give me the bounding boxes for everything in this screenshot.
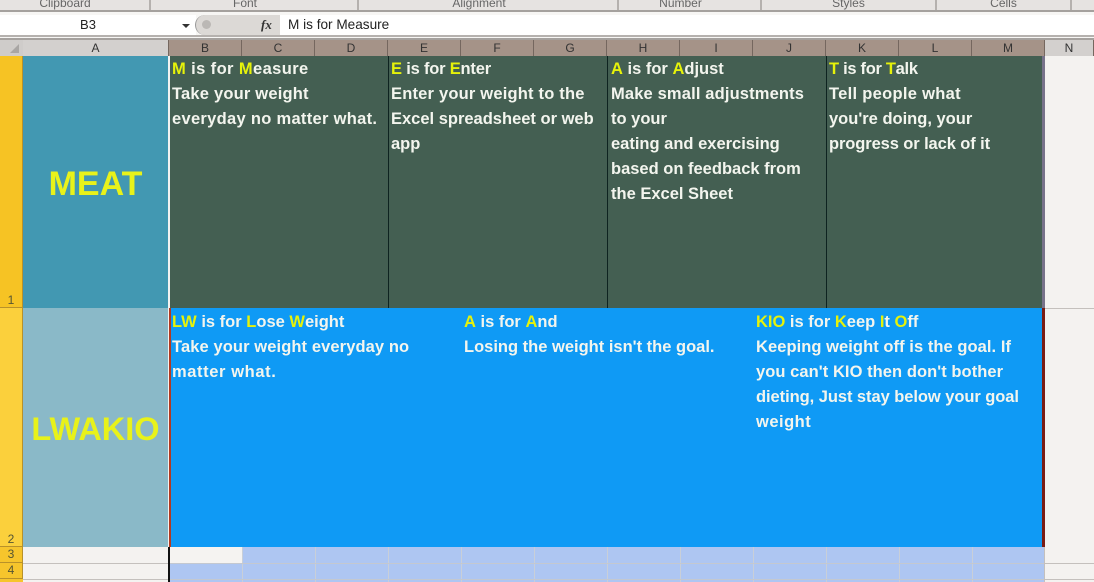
formula bar grip <box>195 15 280 35</box>
text: T is for Talk: you're doing, your <box>829 110 972 128</box>
row number 1 <box>0 56 23 308</box>
header N: N <box>1065 41 1073 55</box>
right edge <box>1044 547 1045 582</box>
text: KIO is for Keep It Off: KIO is for Keep It Off <box>756 313 918 331</box>
name box <box>0 15 196 35</box>
panel: MEAT <box>169 56 1045 308</box>
selection row 4 line <box>170 579 1045 580</box>
row number 4: 4 <box>8 563 14 577</box>
N column row 1 line <box>1045 308 1094 309</box>
text: T is for Talk <box>829 60 990 153</box>
header K <box>826 40 899 56</box>
header G: G <box>565 41 575 55</box>
ribbon group labels <box>0 0 1094 12</box>
text: E is for Enter: app <box>391 135 420 153</box>
row 3 line <box>23 563 1094 564</box>
text: LW is for Lose Weight: Take your weight everyday no <box>172 338 409 356</box>
selection row 3 line <box>170 563 1045 564</box>
text: A is for And: Losing the weight isn't the goal. <box>464 338 715 356</box>
row number 3: 3 <box>8 547 14 561</box>
formula input <box>280 15 1094 35</box>
label cell: LWAKIO <box>23 308 168 547</box>
select all corner <box>0 40 23 56</box>
text: T is for Talk: T is for Talk <box>829 60 918 78</box>
text: KIO is for Keep It Off: you can't KIO then don't bother <box>756 363 1003 381</box>
text: M is for Measure: everyday no matter what. <box>172 110 377 128</box>
header C <box>242 40 315 56</box>
text: A is for Adjust: the Excel Sheet <box>611 185 733 203</box>
corner triangle <box>10 44 19 53</box>
header M <box>972 40 1045 56</box>
header E: E <box>420 41 428 55</box>
header D <box>315 40 388 56</box>
row number 2 <box>0 308 23 547</box>
text: KIO is for Keep It Off: dieting, Just stay below your goal <box>756 388 1019 406</box>
text: LW is for Lose Weight: LW is for Lose Weight <box>172 313 344 331</box>
text: A is for And: A is for And <box>464 313 558 331</box>
header J: J <box>786 41 792 55</box>
row number 1: 1 <box>8 293 14 307</box>
text: A is for Adjust: Make small adjustments <box>611 85 804 103</box>
text: M is for Measure <box>172 60 377 128</box>
row number 4 <box>0 563 23 579</box>
text: A is for Adjust: eating and exercising <box>611 135 780 153</box>
header G <box>534 40 607 56</box>
empty rows grid <box>23 547 1094 582</box>
active cell B3 <box>170 547 242 563</box>
grip knob <box>202 20 211 29</box>
text: E is for Enter: Excel spreadsheet or web <box>391 110 594 128</box>
ribbon: Styles <box>762 0 937 10</box>
divider H <box>607 56 608 308</box>
row number 5 <box>0 579 23 582</box>
ribbon: Clipboard <box>0 0 151 10</box>
text: KIO is for Keep It Off <box>756 313 1019 431</box>
ribbon: Cells <box>937 0 1072 10</box>
ribbon: Font <box>151 0 359 10</box>
text: T is for Talk: progress or lack of it <box>829 135 990 153</box>
header H <box>607 40 680 56</box>
label cell: MEAT: MEAT <box>49 165 142 203</box>
header B <box>169 40 242 56</box>
N column row 2 line <box>1045 547 1094 548</box>
fx icon: fx <box>261 17 272 32</box>
text: M is for Measure: Take your weight <box>172 85 309 103</box>
header M: M <box>1003 41 1013 55</box>
divider K <box>826 56 827 308</box>
label cell: MEAT <box>23 56 168 308</box>
header K: K <box>858 41 866 55</box>
text: LW is for Lose Weight <box>172 313 409 381</box>
label cell: LWAKIO: LWAKIO <box>31 411 160 447</box>
text: A is for And <box>464 313 715 356</box>
formula bar bottom line <box>0 35 1094 37</box>
selected blue area <box>170 547 1045 582</box>
header A: A <box>91 41 100 55</box>
ribbon: Alignment <box>359 0 619 10</box>
header H: H <box>639 41 647 55</box>
text: M is for Measure: M is for Measure <box>172 60 309 78</box>
text: A is for Adjust: based on feedback from <box>611 160 801 178</box>
divider E <box>388 56 389 308</box>
text: E is for Enter <box>391 60 594 153</box>
text: T is for Talk: Tell people what <box>829 85 961 103</box>
header C: C <box>274 41 282 55</box>
header B: B <box>201 41 209 55</box>
text: LW is for Lose Weight: matter what. <box>172 363 276 381</box>
row 4 line <box>23 579 1094 580</box>
header N <box>1045 40 1094 56</box>
header F <box>461 40 534 56</box>
header I: I <box>714 41 718 55</box>
text: A is for Adjust: to your <box>611 110 667 128</box>
ribbon: Number <box>619 0 762 10</box>
header F: F <box>493 41 501 55</box>
text: KIO is for Keep It Off: Keeping weight off is the goal. If <box>756 338 1011 356</box>
header L: L <box>932 41 938 55</box>
formula bar <box>0 12 1094 40</box>
selection edge <box>168 547 170 582</box>
header E <box>388 40 461 56</box>
row number 3 <box>0 547 23 563</box>
header A <box>23 40 169 56</box>
text: A is for Adjust <box>611 60 804 203</box>
text: E is for Enter: Enter your weight to the <box>391 85 585 103</box>
header D: D <box>347 41 355 55</box>
panel: LWAKIO <box>169 308 1045 547</box>
text: E is for Enter: E is for Enter <box>391 60 491 78</box>
row number 2: 2 <box>8 532 14 546</box>
formula input: M is for Measure <box>288 17 389 32</box>
name box arrow <box>182 24 190 28</box>
text: KIO is for Keep It Off: weight <box>756 413 811 431</box>
header J <box>753 40 826 56</box>
name box: B3 <box>80 17 96 32</box>
text: A is for Adjust: A is for Adjust <box>611 60 724 78</box>
header I <box>680 40 753 56</box>
header L <box>899 40 972 56</box>
